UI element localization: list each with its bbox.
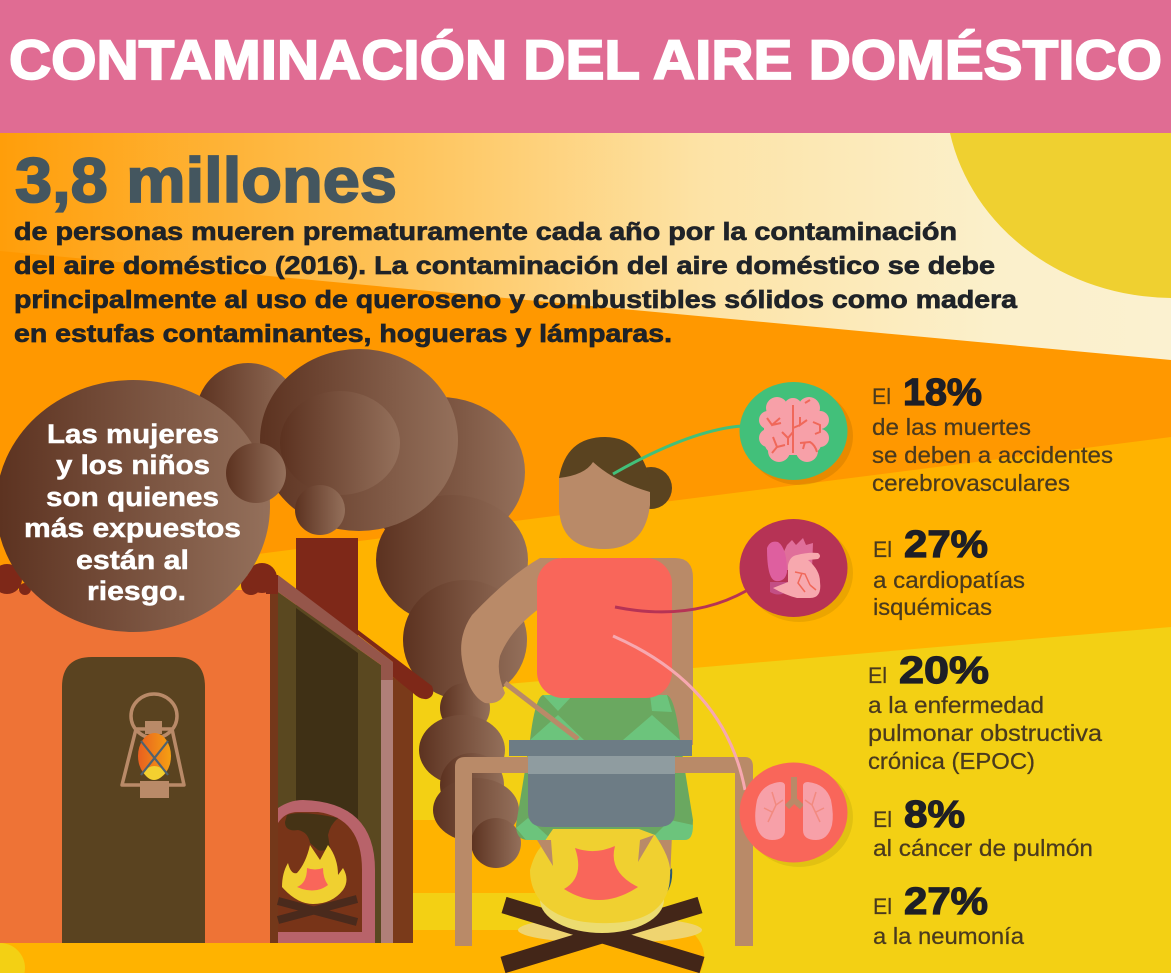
stat: 18%: 18% bbox=[903, 372, 982, 414]
hair bbox=[559, 437, 650, 495]
connector: lungs bbox=[613, 636, 745, 790]
icon: brain bbox=[740, 382, 853, 485]
callout bubble bbox=[0, 380, 270, 632]
skirt bbox=[516, 695, 693, 840]
house wall bbox=[0, 590, 270, 943]
stat: 27% cardiopatias: 27% bbox=[904, 524, 988, 566]
stat: 8% bbox=[873, 794, 1093, 861]
connector: brain bbox=[613, 426, 742, 474]
callout bubble: y los niños bbox=[56, 450, 210, 480]
stat: 27% neumonia: a la neumonía bbox=[873, 923, 1024, 949]
callout bubble: son quienes bbox=[46, 482, 219, 512]
callout bubble: Las mujeres bbox=[47, 419, 219, 449]
icon: heart bbox=[740, 519, 853, 622]
pale glow bbox=[518, 917, 702, 943]
logs bbox=[278, 899, 357, 922]
stat: 18% bbox=[872, 372, 1113, 496]
logs bbox=[503, 905, 702, 965]
stat: 27% cardiopatias: El bbox=[873, 537, 892, 562]
hair bun bbox=[630, 467, 672, 509]
house bbox=[0, 538, 433, 943]
smoke cloud bbox=[196, 349, 528, 868]
arch bbox=[278, 800, 375, 943]
leg tips bbox=[537, 835, 654, 866]
stat: 20%: 20% bbox=[899, 650, 989, 692]
intro text: de personas mueren prematuramente cada año por la contaminación bbox=[14, 218, 957, 246]
title band: CONTAMINACIÓN DEL AIRE DOMÉSTICO bbox=[9, 28, 1162, 91]
table bbox=[455, 757, 753, 946]
intro text: principalmente al uso de queroseno y combustibles sólidos como madera bbox=[14, 286, 1018, 314]
flame bbox=[530, 829, 670, 923]
stat: 20%: crónica (EPOC) bbox=[868, 748, 1035, 774]
stat: 27% neumonia: 27% bbox=[904, 881, 988, 923]
stat: 20%: pulmonar obstructiva bbox=[868, 720, 1102, 746]
stat: 8%: El bbox=[873, 807, 892, 832]
front arm bbox=[461, 558, 560, 703]
chimney bbox=[296, 538, 358, 648]
side wall right bbox=[393, 677, 413, 943]
pale crescent bbox=[540, 867, 664, 933]
roof beads bbox=[0, 563, 278, 595]
skirt pattern bbox=[516, 695, 693, 840]
side panel bbox=[278, 592, 381, 943]
stat: 18%: se deben a accidentes bbox=[872, 442, 1113, 468]
flame bbox=[282, 845, 346, 904]
roof edge bbox=[278, 575, 393, 680]
stat: 8%: al cáncer de pulmón bbox=[873, 835, 1093, 861]
sun bbox=[950, 133, 1171, 298]
face bbox=[559, 462, 650, 549]
title band bbox=[0, 0, 1171, 133]
stat: 27% neumonia bbox=[873, 881, 1024, 949]
stat: 18%: de las muertes bbox=[872, 414, 1031, 440]
stat: 20% bbox=[868, 650, 1102, 774]
right leg bbox=[650, 835, 672, 880]
stat: 18%: cerebrovasculares bbox=[872, 470, 1070, 496]
back arm bbox=[600, 558, 693, 745]
intro text: en estufas contaminantes, hogueras y lámparas. bbox=[14, 320, 672, 348]
stat: 18%: El bbox=[872, 384, 891, 409]
door bbox=[62, 657, 205, 943]
fireplace bbox=[278, 800, 375, 943]
stat: 20%: a la enfermedad bbox=[868, 692, 1044, 718]
stat: 27% neumonia: El bbox=[873, 894, 892, 919]
headline number: 3,8 millones bbox=[15, 146, 397, 216]
callout bubble: riesgo. bbox=[87, 576, 186, 606]
icon: lantern bbox=[122, 694, 184, 798]
stat: 27% cardiopatias: a cardiopatías bbox=[873, 567, 1025, 593]
flame core bbox=[297, 868, 328, 891]
connector: heart bbox=[615, 591, 746, 612]
dress bbox=[537, 558, 672, 698]
intro text bbox=[14, 218, 1018, 348]
campfire bbox=[503, 829, 702, 965]
stat: 20%: El bbox=[868, 663, 887, 688]
smoke puff over bubble bbox=[226, 443, 286, 503]
pot bbox=[509, 740, 692, 827]
light strip bbox=[381, 680, 393, 943]
intro text: del aire doméstico (2016). La contaminación del aire doméstico se debe bbox=[14, 252, 995, 280]
flame core bbox=[564, 846, 638, 900]
callout bubble: más expuestos bbox=[24, 513, 241, 543]
hearth bbox=[278, 812, 362, 932]
callout bubble: están al bbox=[76, 545, 189, 575]
roof edge dark bbox=[358, 630, 433, 699]
spoon bbox=[505, 683, 578, 739]
trouser sliver bbox=[652, 868, 672, 902]
stat: 8%: 8% bbox=[904, 794, 965, 836]
side window dark bbox=[296, 608, 358, 943]
side wall strip bbox=[270, 585, 278, 943]
woman cooking bbox=[455, 437, 753, 946]
stat: 27% cardiopatias: isquémicas bbox=[873, 594, 992, 620]
icon: lungs bbox=[740, 762, 853, 867]
stat: 27% cardiopatias bbox=[873, 524, 1025, 620]
soot bbox=[285, 813, 338, 851]
